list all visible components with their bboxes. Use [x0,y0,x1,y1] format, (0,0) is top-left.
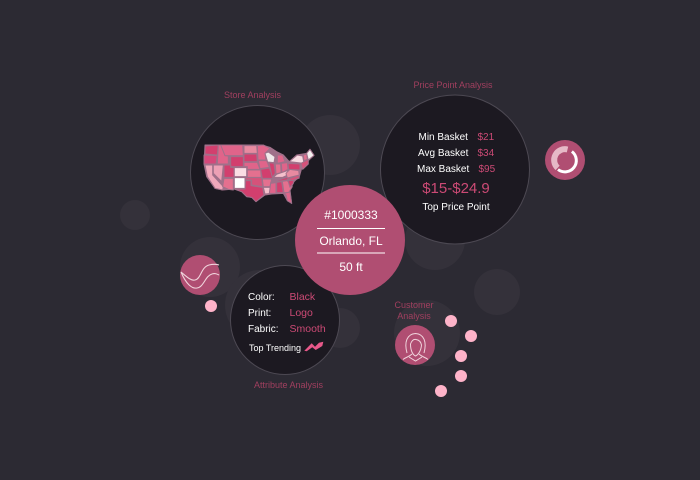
price range: $15-$24.9 [422,180,490,197]
min basket [418,132,495,143]
background circles [120,115,520,366]
color row [248,291,316,303]
store city: Orlando, FL [319,234,383,248]
label: customer analysis: Analysis [397,311,431,321]
icon: customer [395,325,435,365]
min basket: $21 [478,132,495,143]
min basket: Min Basket [418,132,468,143]
max basket: $95 [478,164,496,175]
avg basket [418,148,495,159]
top price point: Top Price Point [422,202,490,213]
icon: waves [180,255,220,295]
icon: donut [545,140,585,180]
panel: price point analysis [380,80,530,244]
store number: #1000333 [324,208,378,222]
panel: store analysis [190,90,324,240]
store size: 50 ft [339,260,363,274]
fabric row [248,323,326,335]
panel: store info [295,185,405,295]
dots: customer scatter [435,315,477,397]
label: store analysis: Store Analysis [224,90,282,100]
dot [205,300,217,312]
max basket [417,164,496,175]
icon: trend arrow [304,342,323,351]
fabric row: Smooth [290,323,326,335]
fabric row: Fabric: [248,324,279,335]
label: price point analysis: Price Point Analysis [413,80,493,90]
panel: attribute analysis [230,266,340,390]
color row: Color: [248,292,275,303]
top trending: Top Trending [249,343,301,353]
print row [248,307,313,319]
color row: Black [290,291,316,303]
map: United States [204,145,314,203]
avg basket: Avg Basket [418,148,469,159]
print row: Logo [290,307,313,319]
label: attribute analysis: Attribute Analysis [254,380,324,390]
max basket: Max Basket [417,164,469,175]
avg basket: $34 [478,148,495,159]
label: customer analysis: Customer [394,300,434,310]
print row: Print: [248,308,271,319]
